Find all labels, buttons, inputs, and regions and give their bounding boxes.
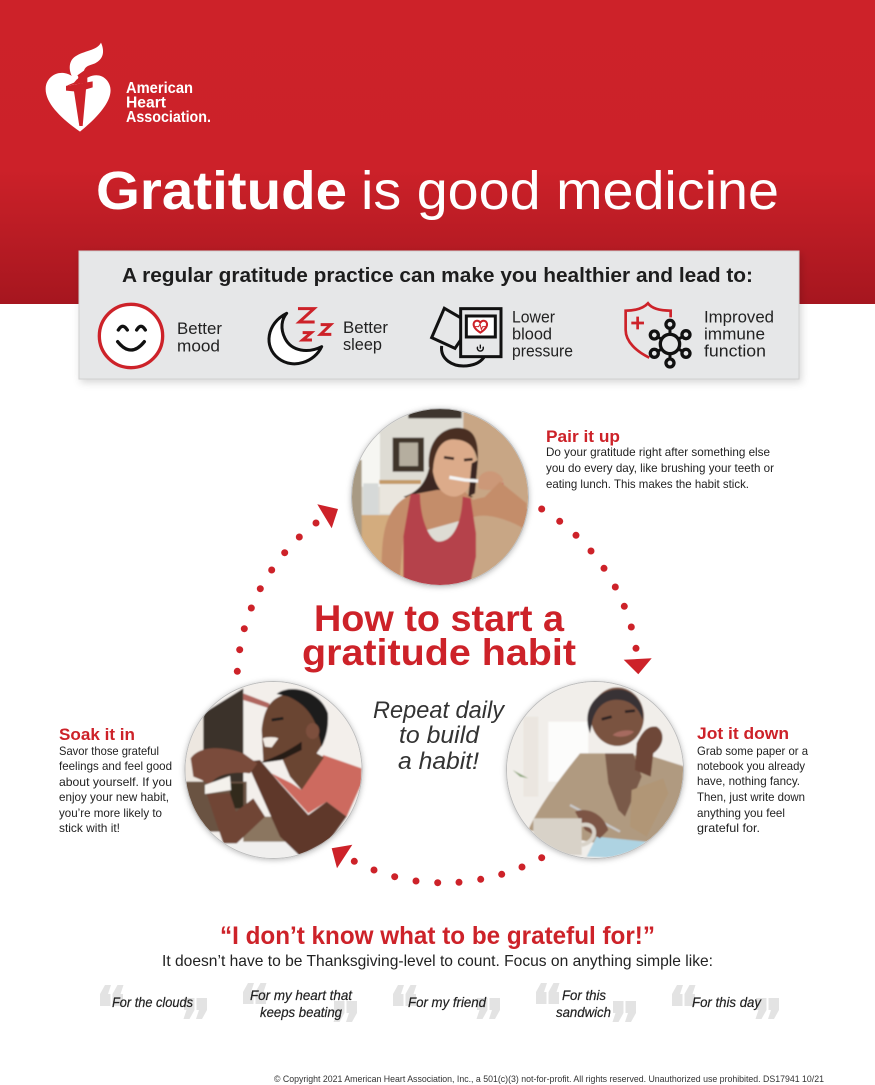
text block: repeat daily <box>373 697 506 775</box>
text block: soak it in <box>59 725 172 835</box>
text block: soak it in: Savor those grateful <box>59 744 159 758</box>
photo: woman brushing teeth <box>348 406 532 590</box>
logo wordmark <box>126 80 211 126</box>
text block: pair it up: Do your gratitude right after something else <box>546 445 770 459</box>
better mood label <box>177 320 223 356</box>
text block: soak it in: about yourself. If you <box>59 775 172 789</box>
text block: jot it down: Grab some paper or a <box>697 744 808 758</box>
text block: pair it up: Pair it up <box>546 427 620 446</box>
heading: how to start a gratitude habit: gratitude habit <box>302 632 576 673</box>
text block: soak it in: stick with it! <box>59 821 120 835</box>
quote: for this sandwich: For this <box>562 987 606 1003</box>
title: Gratitude <box>96 161 347 221</box>
quote: for my friend <box>393 985 500 1019</box>
quote: for my heart: keeps beating <box>260 1004 342 1020</box>
text block: pair it up <box>546 427 774 491</box>
quote: for my heart: For my heart that <box>250 987 353 1003</box>
lower blood pressure label <box>512 308 573 360</box>
photo: woman with notebook <box>503 678 687 862</box>
quote: for the clouds: For the clouds <box>112 994 193 1010</box>
icon: moon and zzz <box>269 309 331 364</box>
better sleep label <box>343 319 389 354</box>
text block: jot it down: anything you feel <box>697 806 785 820</box>
improved immune function label: function <box>704 342 766 360</box>
improved immune function label: immune <box>704 326 765 344</box>
copyright: © Copyright 2021 American Heart Association, Inc., a 501(c)(3) not-for-profit. All rights reserved. Unauthorized use prohibited. DS17941 10/21 <box>274 1074 824 1085</box>
logo wordmark: Association. <box>126 109 211 126</box>
logo wordmark: Heart <box>126 94 166 112</box>
lower blood pressure label: pressure <box>512 342 573 360</box>
logo: American Heart Association <box>46 43 211 132</box>
text block: repeat daily: a habit! <box>398 748 479 775</box>
quote: for the clouds <box>100 985 207 1019</box>
quote: for this sandwich: sandwich <box>556 1004 611 1020</box>
icon: smiley <box>99 304 163 368</box>
text block: soak it in: feelings and feel good <box>59 759 172 773</box>
subheading: It doesn’t have to be Thanksgiving-level to count. Focus on anything simple like: <box>162 953 713 970</box>
logo wordmark: American <box>126 80 193 97</box>
icon: heart and torch <box>46 43 111 132</box>
icon: blood pressure monitor <box>432 308 501 366</box>
better mood label: Better <box>177 320 223 338</box>
quote: for this day: For this day <box>692 994 762 1010</box>
better sleep label: sleep <box>343 336 382 354</box>
text block: repeat daily: to build <box>399 722 480 749</box>
arrow: right dotted arc <box>538 506 652 674</box>
red header background <box>0 0 875 304</box>
text block: repeat daily: Repeat daily <box>373 697 506 724</box>
lower blood pressure label: Lower <box>512 308 555 326</box>
icon: shield and immune cell <box>626 303 690 367</box>
arrow: bottom dotted arc <box>332 845 545 886</box>
text block: jot it down <box>697 724 808 835</box>
text block: jot it down: grateful for. <box>697 821 760 835</box>
panel: health benefits <box>79 251 799 379</box>
text block: jot it down: Then, just write down <box>697 790 805 804</box>
quote: for this sandwich <box>536 983 636 1022</box>
quote: for my friend: For my friend <box>408 994 487 1010</box>
heading: quote: “I don’t know what to be grateful for!” <box>220 922 655 950</box>
lower blood pressure label: blood <box>512 326 552 344</box>
text block: jot it down: notebook you already <box>697 759 805 773</box>
arrow: left dotted arc <box>234 504 338 675</box>
quote: for this day <box>672 985 779 1019</box>
title: is good medicine <box>361 161 779 221</box>
heading: how to start a gratitude habit <box>302 598 576 673</box>
quote: for my heart <box>243 983 357 1022</box>
text block: soak it in: Soak it in <box>59 725 135 744</box>
text block: jot it down: have, nothing fancy. <box>697 774 800 788</box>
heading: how to start a gratitude habit: How to start a <box>314 598 564 639</box>
text block: pair it up: eating lunch. This makes the habit stick. <box>546 477 749 491</box>
better sleep label: Better <box>343 319 389 337</box>
text block: pair it up: you do every day, like brushing your teeth or <box>546 461 774 475</box>
text block: soak it in: enjoy your new habit, <box>59 790 169 804</box>
text block: soak it in: you’re more likely to <box>59 806 162 820</box>
title <box>96 161 779 221</box>
photo: smiling man with a cup <box>180 677 367 865</box>
improved immune function label <box>704 308 774 360</box>
benefits heading: A regular gratitude practice can make you healthier and lead to: <box>122 265 753 287</box>
text block: jot it down: Jot it down <box>697 724 789 743</box>
improved immune function label: Improved <box>704 308 774 326</box>
better mood label: mood <box>177 338 220 356</box>
